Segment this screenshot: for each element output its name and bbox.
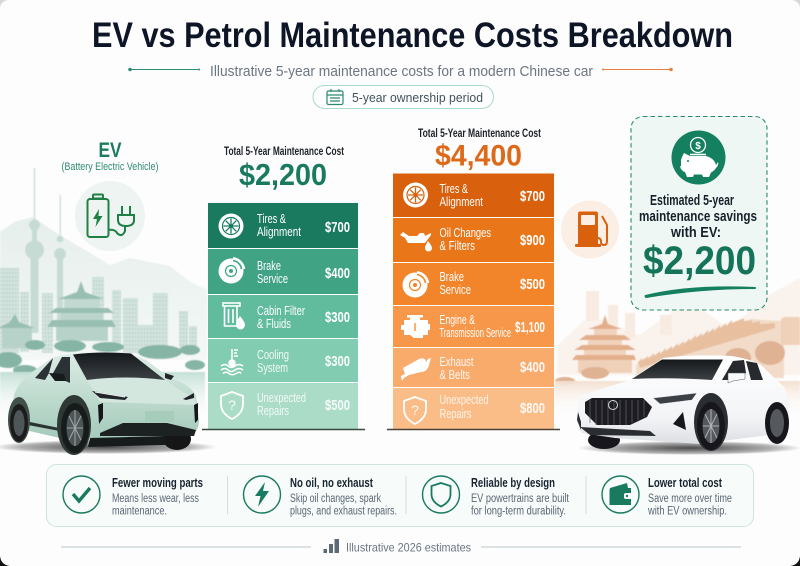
- row: unexpected repairs: Unexpected: [257, 390, 306, 405]
- benefit: no oil no exhaust: plugs, and exhaust repairs.: [290, 506, 397, 518]
- row: unexpected repairs: [208, 383, 358, 429]
- row: tires and alignment: $700: [520, 188, 545, 205]
- row: cooling system: Cooling: [257, 347, 289, 362]
- row: cabin filter and fluids: Cabin Filter: [257, 303, 305, 318]
- benefit: reliable by design: EV powertrains are built: [471, 493, 570, 505]
- row: engine and transmission: Engine &: [440, 312, 475, 327]
- panel: benefits: [46, 464, 754, 526]
- savings text: maintenance savings: [639, 208, 757, 225]
- benefit: no oil no exhaust: No oil, no exhaust: [290, 476, 374, 490]
- row: cooling system: $300: [325, 353, 350, 370]
- row: cooling system: [208, 339, 358, 382]
- benefit: reliable by design: Reliable by design: [471, 476, 555, 490]
- row: brake service: Service: [257, 271, 288, 286]
- row: cabin filter and fluids: & Fluids: [257, 316, 291, 331]
- benefit: fewer moving parts: [63, 476, 203, 518]
- row: brake service: [393, 263, 554, 305]
- benefit: lower total cost: [602, 476, 732, 518]
- row: unexpected repairs: Repairs: [257, 403, 289, 418]
- subtitle with rules: Illustrative 5-year maintenance costs for a modern Chinese car: [210, 64, 593, 80]
- icon: piggy bank: $: [695, 141, 701, 152]
- row: unexpected repairs: $500: [325, 397, 350, 414]
- row: brake service: Brake: [440, 269, 464, 284]
- row: oil changes and filters: $900: [520, 232, 545, 249]
- EV total cost: Total 5-Year Maintenance Cost: [224, 144, 344, 158]
- EV cost stack: [202, 203, 365, 430]
- benefit: reliable by design: for long-term durability.: [471, 506, 566, 518]
- benefit: reliable by design: [422, 476, 570, 518]
- row: exhaust and belts: [393, 348, 554, 387]
- row: unexpected repairs: Unexpected: [440, 392, 488, 407]
- benefit: no oil no exhaust: [244, 476, 397, 518]
- row: tires and alignment: Alignment: [440, 194, 483, 209]
- savings text: with EV:: [670, 224, 721, 241]
- petrol total cost: $4,400: [435, 140, 522, 172]
- row: oil changes and filters: Oil Changes: [440, 225, 491, 240]
- row: brake service: $500: [520, 276, 545, 293]
- ownership period pill: [313, 86, 494, 108]
- row: exhaust and belts: $400: [520, 359, 545, 376]
- EV car: [0, 352, 217, 455]
- benefit: no oil no exhaust: Skip oil changes, spark: [290, 493, 381, 505]
- row: brake service: $400: [325, 265, 350, 282]
- ownership period pill: 5-year ownership period: [352, 90, 483, 105]
- row: tires and alignment: $700: [325, 219, 350, 236]
- orange Great Wall backdrop: [555, 278, 800, 416]
- benefit: lower total cost: Save more over time: [648, 493, 732, 505]
- savings text: [639, 192, 757, 241]
- savings amount: $2,200: [643, 239, 756, 283]
- benefit: lower total cost: Lower total cost: [648, 476, 723, 490]
- benefit: fewer moving parts: Fewer moving parts: [112, 476, 203, 490]
- row: brake service: Service: [440, 282, 471, 297]
- EV total cost: $2,200: [239, 157, 327, 192]
- row: engine and transmission: [393, 306, 554, 347]
- EV total cost: [224, 144, 344, 192]
- row: oil changes and filters: [393, 218, 554, 262]
- petrol total cost: [418, 126, 541, 172]
- row: cabin filter and fluids: $300: [325, 309, 350, 326]
- panel: estimated savings: [631, 116, 767, 310]
- benefit: fewer moving parts: Means less wear, less: [112, 493, 199, 505]
- EV heading: [62, 139, 158, 173]
- row: oil changes and filters: & Filters: [440, 238, 475, 253]
- row: cabin filter and fluids: [208, 295, 358, 338]
- benefit: fewer moving parts: maintenance.: [112, 506, 167, 518]
- row: engine and transmission: Transmission Service: [440, 325, 511, 340]
- footer note: Illustrative 2026 estimates: [346, 540, 471, 554]
- row: brake service: Brake: [257, 258, 281, 273]
- icon: fuel pump: [561, 200, 619, 258]
- petrol cost stack: [387, 174, 560, 430]
- row: exhaust and belts: Exhaust: [440, 354, 474, 369]
- row: unexpected repairs: Repairs: [440, 406, 472, 421]
- row: engine and transmission: $1,100: [515, 319, 545, 336]
- savings text: Estimated 5-year: [650, 192, 734, 209]
- footer note: [61, 539, 741, 554]
- petrol total cost: Total 5-Year Maintenance Cost: [418, 126, 541, 140]
- EV heading: EV: [98, 139, 122, 162]
- row: brake service: [208, 249, 358, 294]
- row: unexpected repairs: [393, 388, 554, 429]
- petrol car: [577, 355, 800, 455]
- benefit: lower total cost: with EV ownership.: [647, 506, 727, 518]
- row: unexpected repairs: $800: [520, 400, 545, 417]
- row: tires and alignment: [393, 174, 554, 217]
- icon: piggy bank: [672, 130, 726, 184]
- row: tires and alignment: Tires &: [257, 211, 286, 226]
- row: tires and alignment: Alignment: [257, 224, 301, 239]
- green Shanghai skyline backdrop: [0, 168, 207, 422]
- row: tires and alignment: Tires &: [440, 181, 468, 196]
- EV heading: (Battery Electric Vehicle): [62, 161, 158, 173]
- icon: battery and plug: [75, 181, 145, 251]
- row: cooling system: System: [257, 360, 288, 375]
- row: exhaust and belts: & Belts: [440, 367, 470, 382]
- row: tires and alignment: [208, 203, 358, 248]
